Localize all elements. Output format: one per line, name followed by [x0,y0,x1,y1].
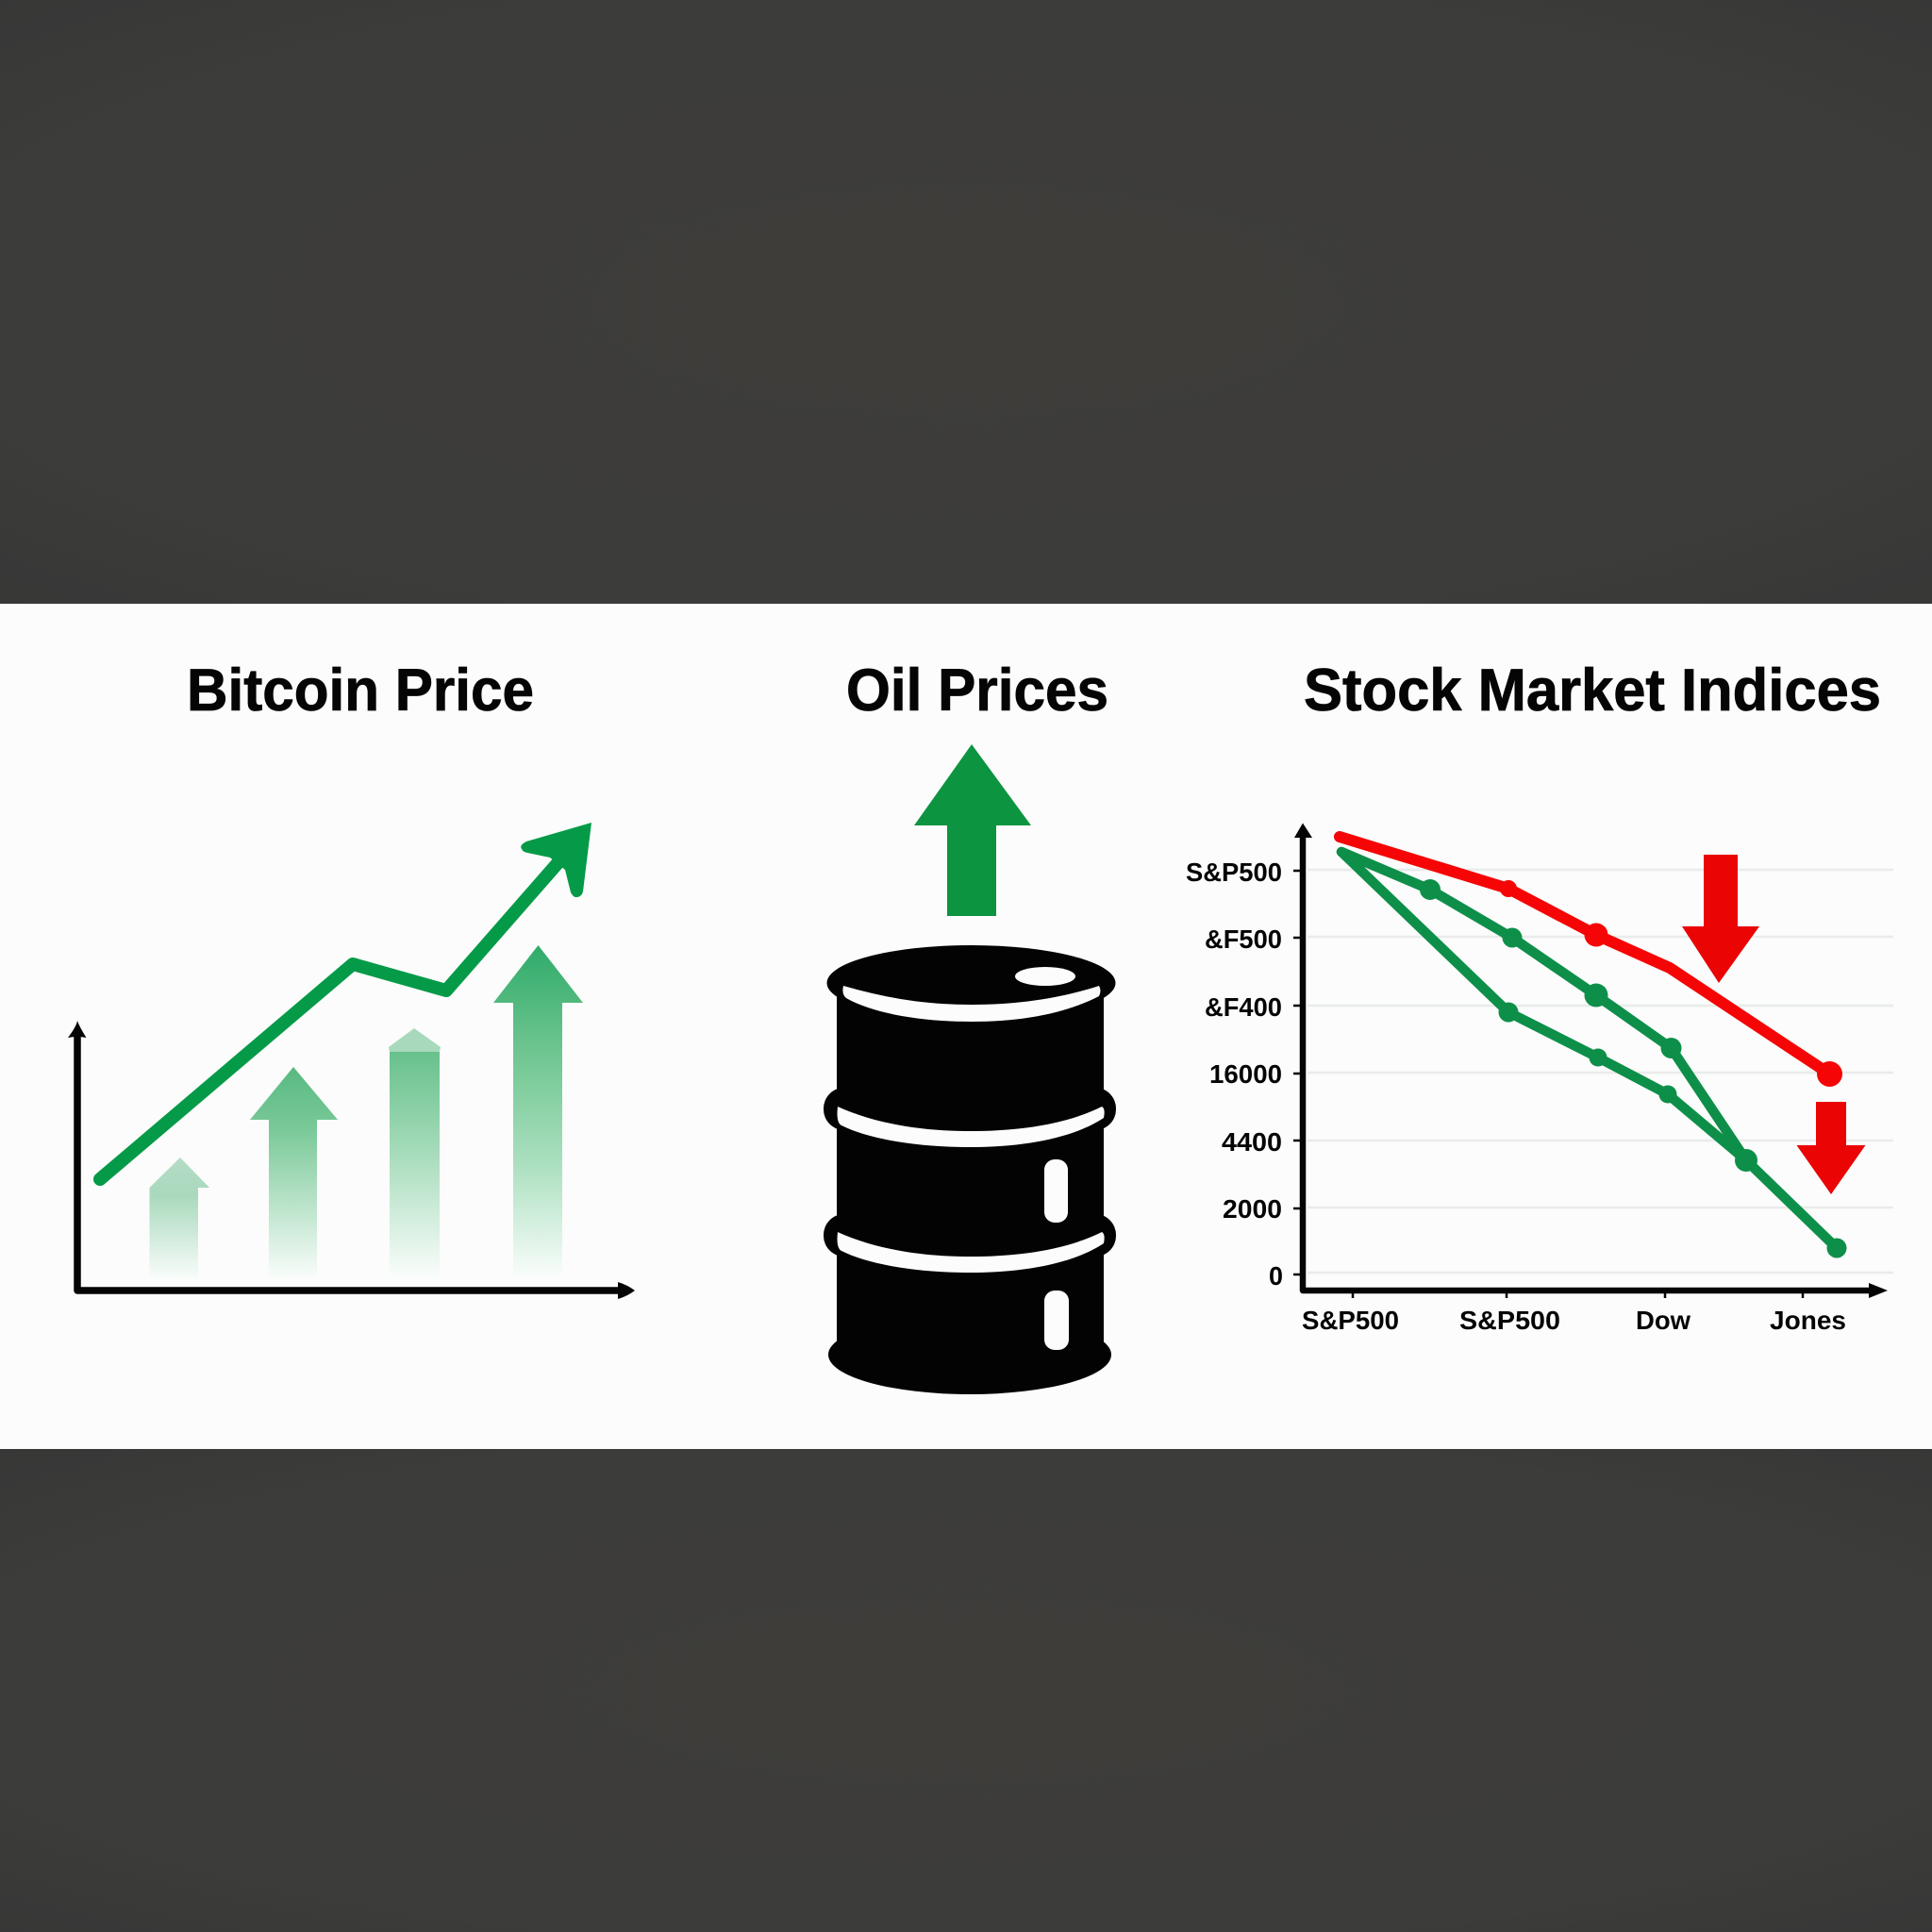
red series line [1340,837,1842,1087]
x axis labels: Dow [1636,1306,1690,1335]
fading green arrow 1 [149,1158,209,1278]
central white panel [0,604,1932,1449]
chart axes [68,1021,635,1299]
y axis labels: 2000 [1223,1194,1282,1224]
red down arrow 1 [1682,855,1759,983]
chart axes [1293,823,1888,1298]
panel: oil prices [824,658,1116,1394]
x axis labels: S&P500 [1459,1306,1560,1335]
y axis labels: 0 [1269,1261,1283,1291]
green series line A [1341,852,1746,1160]
red down arrow 2 [1796,1102,1866,1194]
y axis labels: 16000 [1209,1059,1282,1089]
y axis labels: &F400 [1205,992,1282,1022]
y axis labels: &F500 [1205,924,1282,954]
heading: Stock Market Indices: Stock Market Indices [1304,658,1881,724]
fading green arrow 2 [250,1067,338,1278]
fading green arrow 4 [493,945,583,1278]
x axis labels [1302,1306,1846,1335]
x axis labels: Jones [1770,1306,1846,1335]
panel: stock market indices [1186,658,1893,1335]
green series line B [1341,852,1847,1258]
green up arrow [914,744,1031,916]
panel: bitcoin price [68,658,635,1299]
icon: oil barrel [824,945,1116,1394]
y axis labels [1186,858,1283,1291]
rising green trend line with arrow [100,823,591,1179]
x axis labels: S&P500 [1302,1306,1399,1335]
fading green arrow 3 [389,1028,441,1278]
y axis labels: S&P500 [1186,858,1282,887]
bottom dark band [0,1449,1932,1932]
heading: Bitcoin Price: Bitcoin Price [187,658,534,724]
top dark band [0,0,1932,604]
heading: Oil Prices: Oil Prices [846,658,1108,724]
y axis labels: 4400 [1222,1127,1282,1157]
